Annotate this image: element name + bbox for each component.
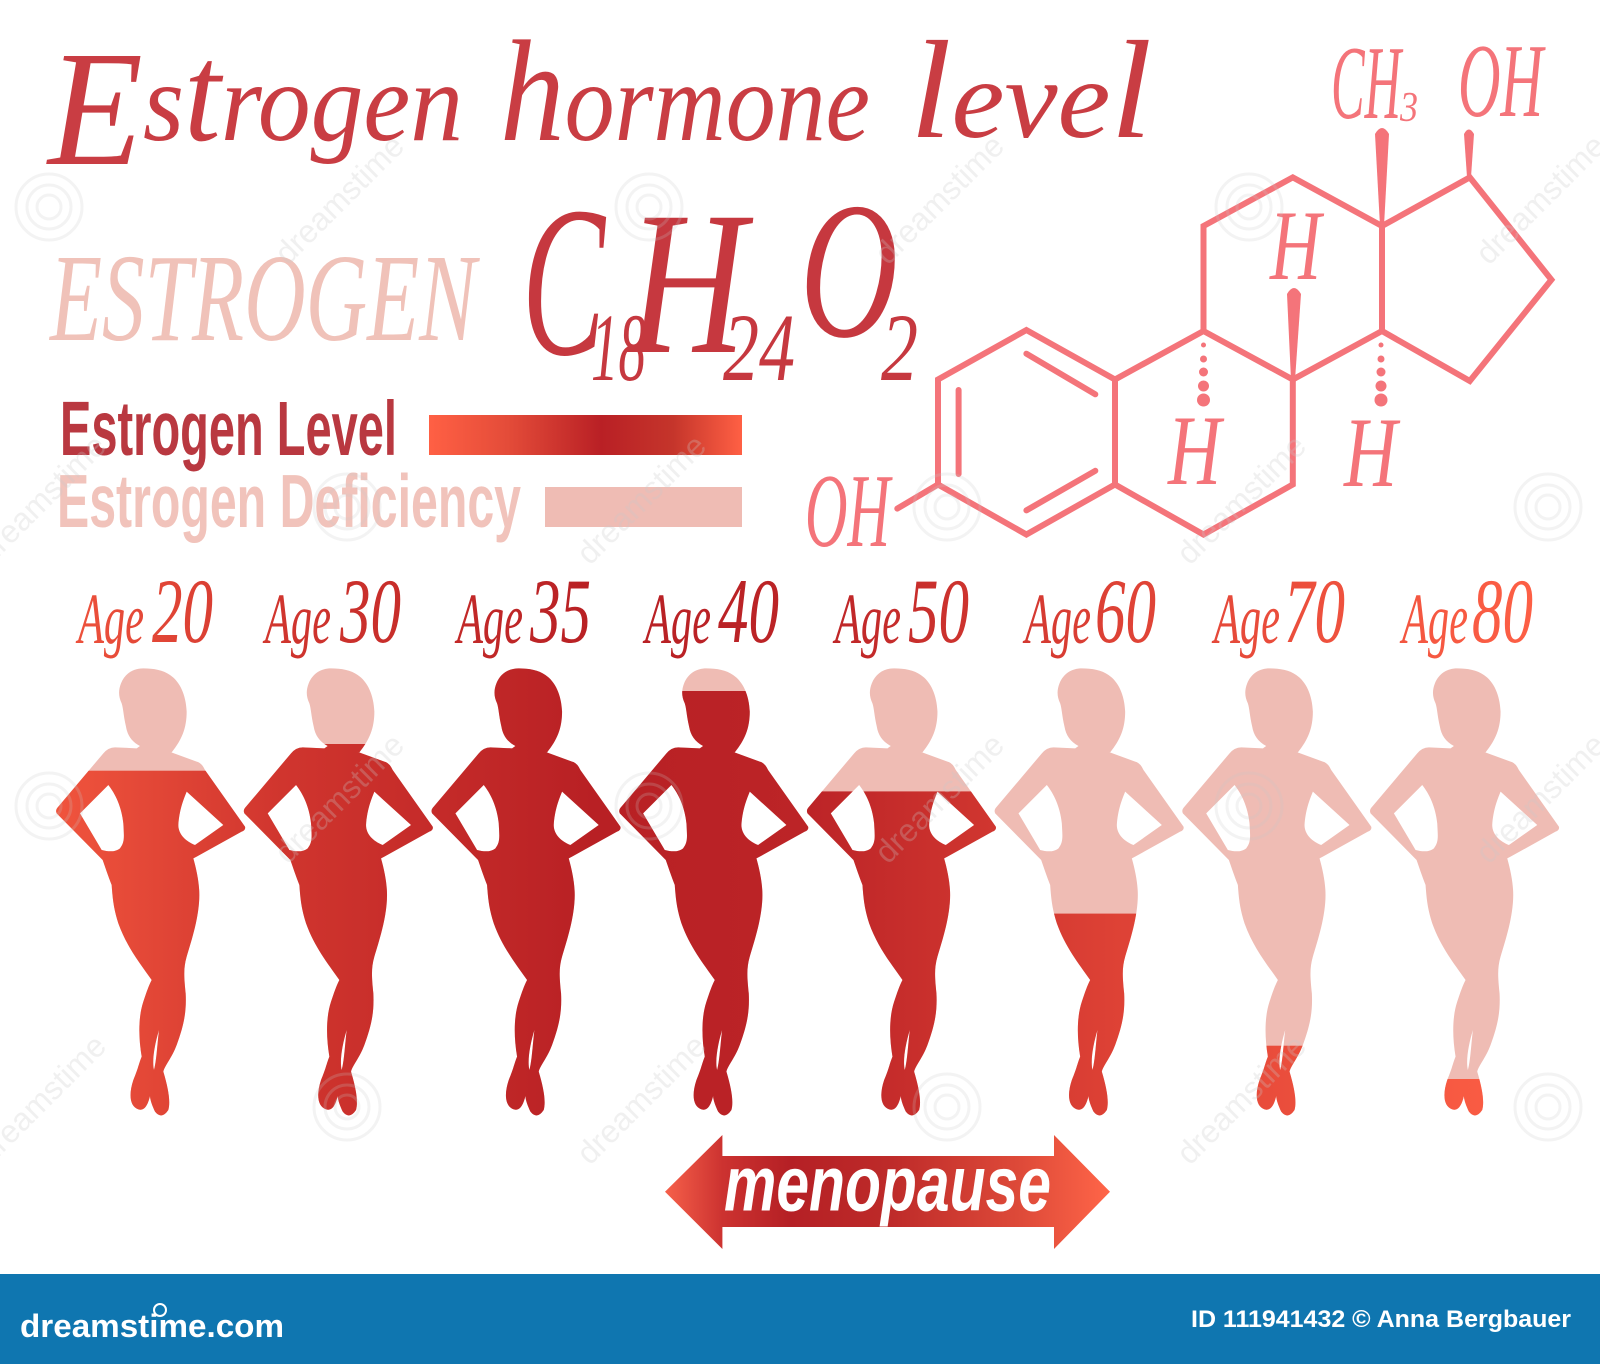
figure: age 40: [619, 668, 808, 1116]
heading: ESTROGEN: ESTROGEN: [49, 230, 481, 368]
molecule structure diagram: CH: [1331, 24, 1403, 141]
chemical formula: H: [626, 170, 754, 397]
figure: age 50: [806, 668, 996, 1116]
molecule structure diagram: [805, 22, 1551, 569]
title: s: [143, 41, 184, 165]
title: level: [910, 13, 1152, 168]
age labels: 40: [718, 560, 779, 662]
text: dreamstime: [569, 427, 713, 571]
figure: age 30: [244, 668, 433, 1116]
age labels: 60: [1095, 560, 1156, 662]
age labels: Age: [1212, 579, 1280, 659]
age labels: Age: [455, 579, 523, 659]
text: dreamstime: [867, 127, 1011, 271]
age labels: Age: [76, 579, 144, 659]
molecule structure diagram: H: [1343, 397, 1401, 508]
text: dreamstime: [267, 127, 411, 271]
age labels: 70: [1284, 560, 1345, 662]
figure: age 80: [1370, 668, 1560, 1116]
figure: age 60: [994, 668, 1184, 1116]
footer logo: dreamstime.com: [20, 1308, 284, 1344]
title: E: [46, 17, 143, 200]
figure: age 35: [432, 668, 621, 1116]
age labels: 80: [1472, 560, 1533, 662]
chemical formula: 2: [881, 294, 918, 401]
menopause arrow: menopause: [724, 1140, 1051, 1228]
chemical formula: O: [800, 163, 898, 379]
figure: age 20: [56, 668, 246, 1116]
text: dreamstime: [867, 726, 1011, 870]
molecule structure diagram: 3: [1399, 85, 1418, 131]
age labels: Age: [643, 579, 711, 659]
molecule structure diagram: H: [1167, 395, 1225, 506]
age labels: Age: [1023, 579, 1091, 659]
age labels: Age: [833, 579, 901, 659]
chemical formula: C: [522, 162, 607, 401]
age labels: Age: [1400, 579, 1468, 659]
age labels: 50: [908, 560, 969, 662]
chemical formula: 18: [591, 294, 646, 401]
footer credit: ID 111941432 © Anna Bergbauer: [1191, 1306, 1571, 1333]
chemical formula: [522, 162, 918, 401]
age labels: [76, 560, 1533, 662]
age labels: 35: [529, 560, 591, 662]
title: hormone: [500, 12, 870, 172]
age labels: 30: [339, 560, 401, 662]
menopause arrow: [665, 1135, 1110, 1249]
figure: age 70: [1182, 668, 1372, 1116]
text: dreamstime: [267, 726, 411, 870]
chemical formula: 24: [723, 294, 795, 401]
age labels: 20: [152, 560, 213, 662]
text: dreamstime: [1169, 1027, 1313, 1171]
text: dreamstime: [569, 1027, 713, 1171]
age labels: Age: [263, 579, 331, 659]
title: [46, 12, 1152, 200]
title: trogen: [184, 16, 478, 171]
molecule structure diagram: H: [1269, 190, 1324, 301]
footer bar: [0, 1274, 1600, 1364]
legend: estrogen level: Estrogen Level: [60, 386, 397, 472]
legend: estrogen deficiency: Estrogen Deficiency: [57, 459, 521, 543]
text: dreamstime: [1169, 427, 1313, 571]
molecule structure diagram: OH: [805, 452, 893, 569]
